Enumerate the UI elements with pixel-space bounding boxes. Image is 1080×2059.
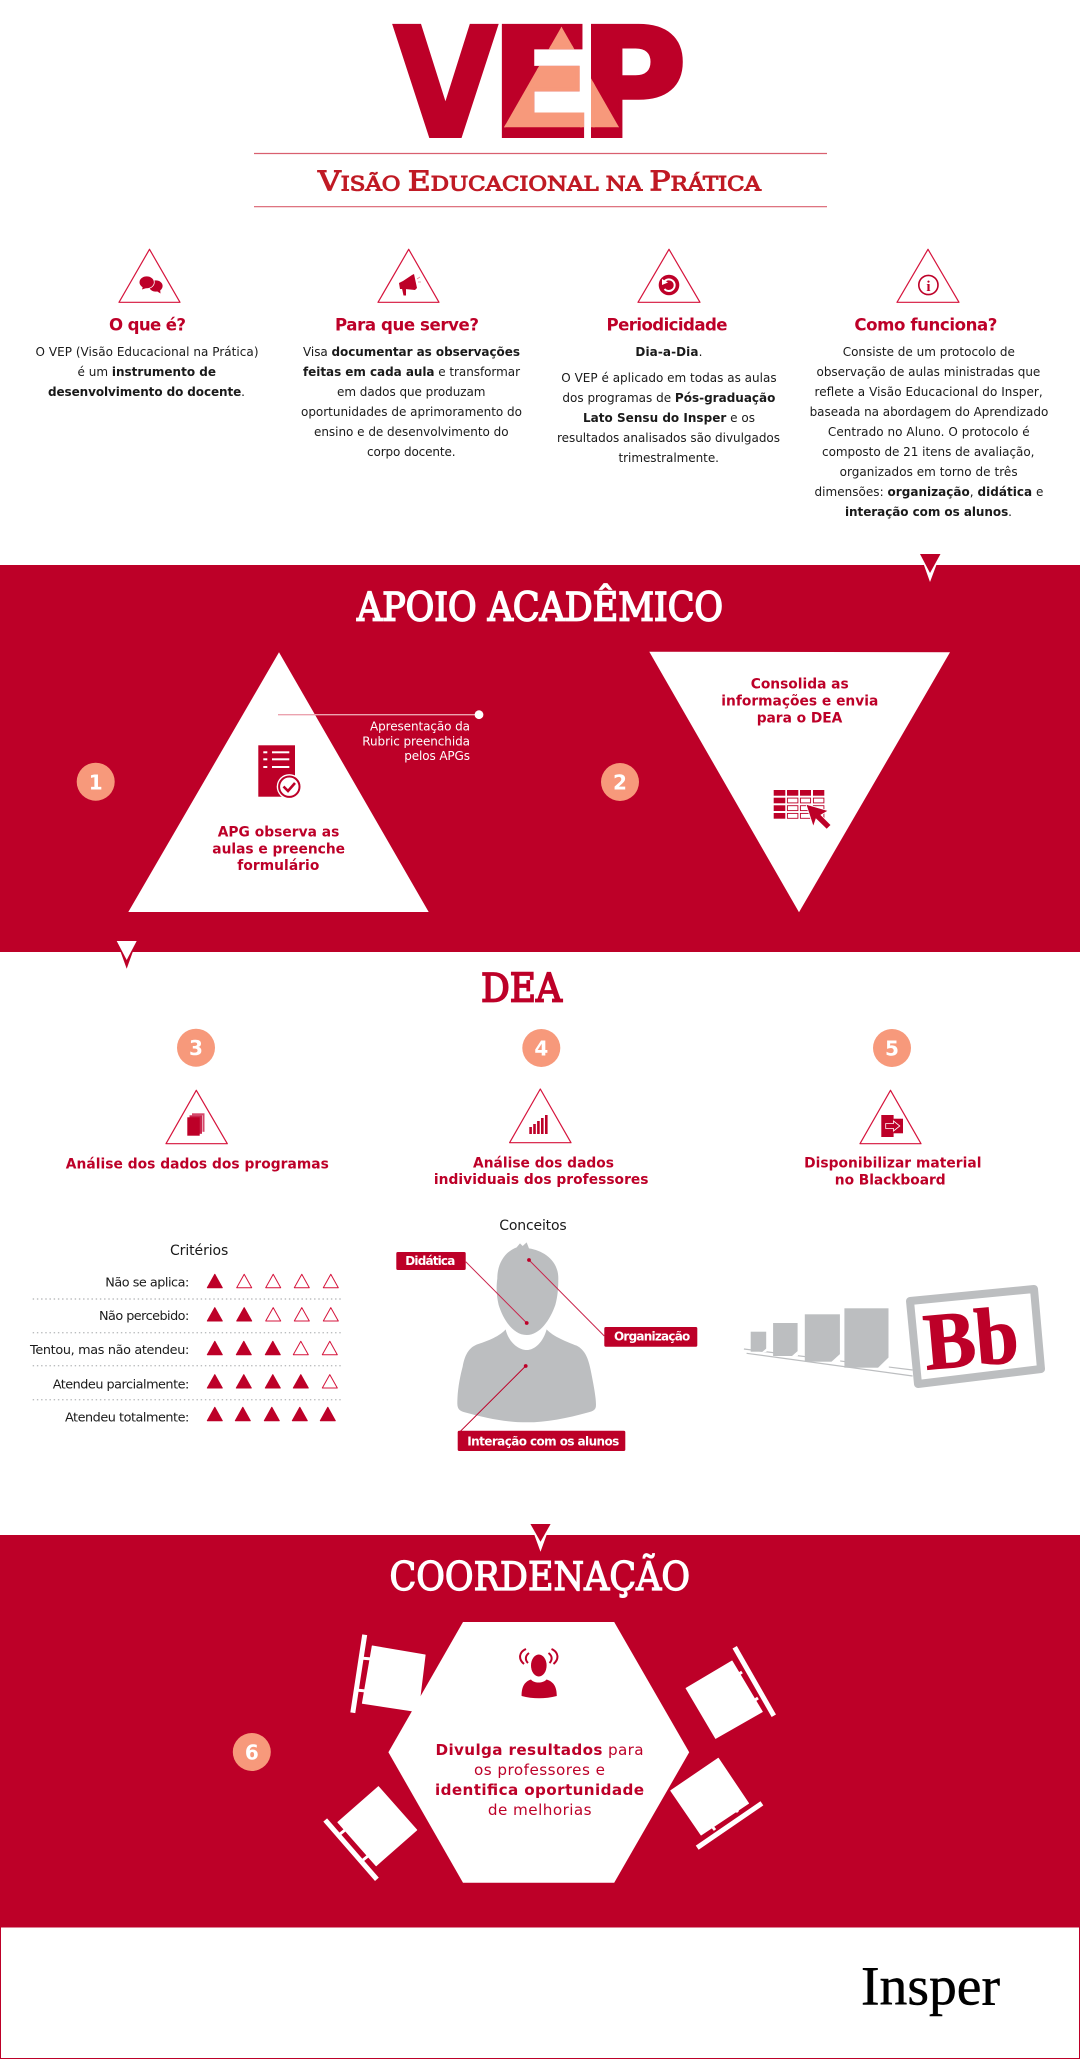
logo: Blackboard: Bb <box>920 1291 1022 1388</box>
panel: step 4 <box>434 1029 648 1188</box>
text block: corpo docente. <box>367 445 456 459</box>
row: tentou: Tentou, mas não atendeu: <box>29 1343 189 1358</box>
icon: refresh in triangle <box>638 249 700 302</box>
label: APG observa as <box>218 825 339 841</box>
callout: interação com os alunos <box>458 1364 625 1451</box>
chair: bottom left <box>325 1787 417 1879</box>
text block: resultados analisados são divulgados <box>557 431 780 445</box>
step number 5 <box>873 1029 911 1067</box>
callout: organização: Organização <box>614 1329 690 1343</box>
text block: composto de 21 itens de avaliação, <box>822 445 1034 459</box>
text block: O VEP (Visão Educacional na Prática) <box>36 345 258 359</box>
label <box>804 1156 982 1188</box>
label: Disponibilizar material <box>804 1156 982 1172</box>
logo: Insper: Insper <box>861 1955 1000 2016</box>
heading: APOIO ACADÊMICO <box>356 584 723 631</box>
logo: VEP: E <box>490 0 593 172</box>
label: informações e envia <box>721 694 878 710</box>
text block: oportunidades de aprimoramento do <box>301 405 522 419</box>
callout: rubric: Apresentação da <box>370 720 470 734</box>
step number 1: 1 <box>89 770 103 794</box>
panel: step 3 <box>66 1029 329 1172</box>
text block: feitas em cada aula e transformar <box>303 365 520 379</box>
step number 3: 3 <box>189 1036 203 1060</box>
step number 6: 6 <box>245 1740 259 1764</box>
heading: Conceitos <box>499 1218 567 1234</box>
text block: observação de aulas ministradas que <box>816 365 1040 379</box>
row: não se aplica: Não se aplica: <box>105 1275 189 1290</box>
text block: Visa documentar as observações <box>303 345 520 359</box>
heading: Periodicidade <box>606 316 728 335</box>
label: Consolida as <box>751 676 849 692</box>
label: para o DEA <box>757 710 843 726</box>
panel: critérios <box>29 1243 342 1426</box>
chair: top left <box>353 1635 425 1713</box>
text block: dimensões: organização, didática e <box>814 485 1043 499</box>
row: totalmente <box>65 1407 335 1426</box>
heading: O que é? <box>109 316 186 335</box>
label: individuais dos professores <box>434 1172 648 1188</box>
panel: apoio acadêmico <box>0 554 1080 952</box>
footer <box>0 1927 1080 2058</box>
hexagon <box>388 1622 689 1883</box>
icon: speech bubbles in triangle <box>119 249 180 302</box>
arrow: into coordenação <box>530 1524 551 1552</box>
logo: VEP: P <box>580 0 687 173</box>
text block <box>435 1741 644 1819</box>
logo: VEP: V <box>394 0 497 172</box>
text block <box>36 345 258 399</box>
icon: person with signal waves <box>520 1649 557 1698</box>
label: Análise dos dados dos programas <box>66 1156 329 1172</box>
text block: reflete a Visão Educacional do Insper, <box>814 385 1043 399</box>
figure: person silhouette <box>457 1242 596 1422</box>
row: não percebido <box>99 1308 338 1324</box>
text block: Divulga resultados para <box>436 1741 644 1759</box>
panel: periodicidade <box>557 249 780 465</box>
row: parcialmente: Atendeu parcialmente: <box>53 1377 189 1392</box>
step number 2 <box>601 763 639 801</box>
heading: COORDENAÇÃO <box>390 1553 690 1600</box>
step 1 triangle <box>128 652 483 912</box>
callout: didática <box>396 1252 529 1325</box>
panel: o que é <box>36 249 258 399</box>
label <box>434 1156 648 1188</box>
step number 3 <box>177 1029 215 1067</box>
heading: Critérios <box>170 1243 228 1259</box>
text block: Consiste de um protocolo de <box>843 345 1015 359</box>
callout: interação com os alunos: Interação com os alunos <box>467 1434 619 1448</box>
panel: para que serve <box>301 249 522 459</box>
text block: Lato Sensu do Insper e os <box>583 411 755 425</box>
icon: documents in triangle <box>166 1090 227 1144</box>
callout: organização <box>527 1258 697 1347</box>
panel: step 5 <box>804 1029 982 1188</box>
icon: table with cursor <box>774 790 831 829</box>
icon: megaphone in triangle <box>378 249 439 302</box>
logo: VEP: P <box>580 0 687 173</box>
panel: conceitos <box>396 1218 697 1451</box>
icon: bar chart in triangle <box>510 1089 571 1143</box>
callout: rubric <box>278 710 483 763</box>
text block: Dia-a-Dia. <box>635 345 702 359</box>
row: parcialmente <box>53 1375 337 1392</box>
heading: Para que serve? <box>335 316 479 335</box>
text block: desenvolvimento do docente. <box>48 385 245 399</box>
icon: exit door in triangle <box>860 1090 921 1144</box>
step number 4 <box>522 1029 560 1067</box>
callout: didática: Didática <box>405 1254 455 1268</box>
text block <box>301 345 522 459</box>
text block: os professores e <box>474 1761 605 1779</box>
step number 4: 4 <box>534 1036 548 1060</box>
text block: O VEP é aplicado em todas as aulas <box>561 371 777 385</box>
label: formulário <box>237 858 319 874</box>
text block: identifica oportunidade <box>435 1781 644 1799</box>
text block: dos programas de Pós-graduação <box>562 391 775 405</box>
logo: VEP: E <box>490 0 593 172</box>
icon: info in triangle: i <box>926 279 930 295</box>
icon: info in triangle <box>897 249 959 302</box>
row: totalmente: Atendeu totalmente: <box>65 1411 189 1426</box>
text block: ensino e de desenvolvimento do <box>314 425 509 439</box>
step 2 triangle <box>649 652 950 912</box>
callout: rubric: pelos APGs <box>404 749 470 763</box>
icon: checklist document <box>258 745 302 799</box>
illustration: documents moving to Blackboard <box>744 1289 1041 1388</box>
row: não se aplica <box>105 1274 338 1290</box>
chair: bottom right <box>671 1758 762 1848</box>
step number 2: 2 <box>613 770 627 794</box>
text block <box>810 345 1048 519</box>
row: não percebido: Não percebido: <box>99 1309 189 1324</box>
step number 6 <box>233 1733 271 1771</box>
step number 5: 5 <box>885 1036 899 1060</box>
panel: coordenação <box>0 1524 1080 1927</box>
text block: de melhorias <box>488 1801 592 1819</box>
heading: Como funciona? <box>854 316 997 335</box>
arrow: into apoio acadêmico <box>920 554 940 582</box>
text block: em dados que produzam <box>337 385 486 399</box>
label <box>212 825 345 874</box>
row: tentou <box>29 1341 337 1358</box>
step number 1 <box>77 763 115 801</box>
logo: VEP <box>392 24 683 138</box>
panel: como funciona <box>810 249 1048 519</box>
text block: Centrado no Aluno. O protocolo é <box>828 425 1030 439</box>
text block: é um instrumento de <box>78 365 216 379</box>
label: aulas e preenche <box>212 841 345 857</box>
text block: trimestralmente. <box>618 451 719 465</box>
text block <box>557 345 780 465</box>
label <box>721 676 878 726</box>
label: no Blackboard <box>835 1172 946 1188</box>
heading: DEA: DEA <box>481 967 563 1012</box>
text block: organizados em torno de três <box>840 465 1018 479</box>
callout: rubric: Rubric preenchida <box>362 734 470 748</box>
label: Análise dos dados <box>473 1156 614 1172</box>
text block: baseada na abordagem do Aprendizado <box>810 405 1048 419</box>
text block: interação com os alunos. <box>845 505 1012 519</box>
subtitle: Visão Educacional na Prática: VISÃO EDUCACIONAL NA PRÁTICA <box>317 167 762 198</box>
chair: top right <box>686 1647 774 1738</box>
arrow: into DEA <box>117 941 137 969</box>
